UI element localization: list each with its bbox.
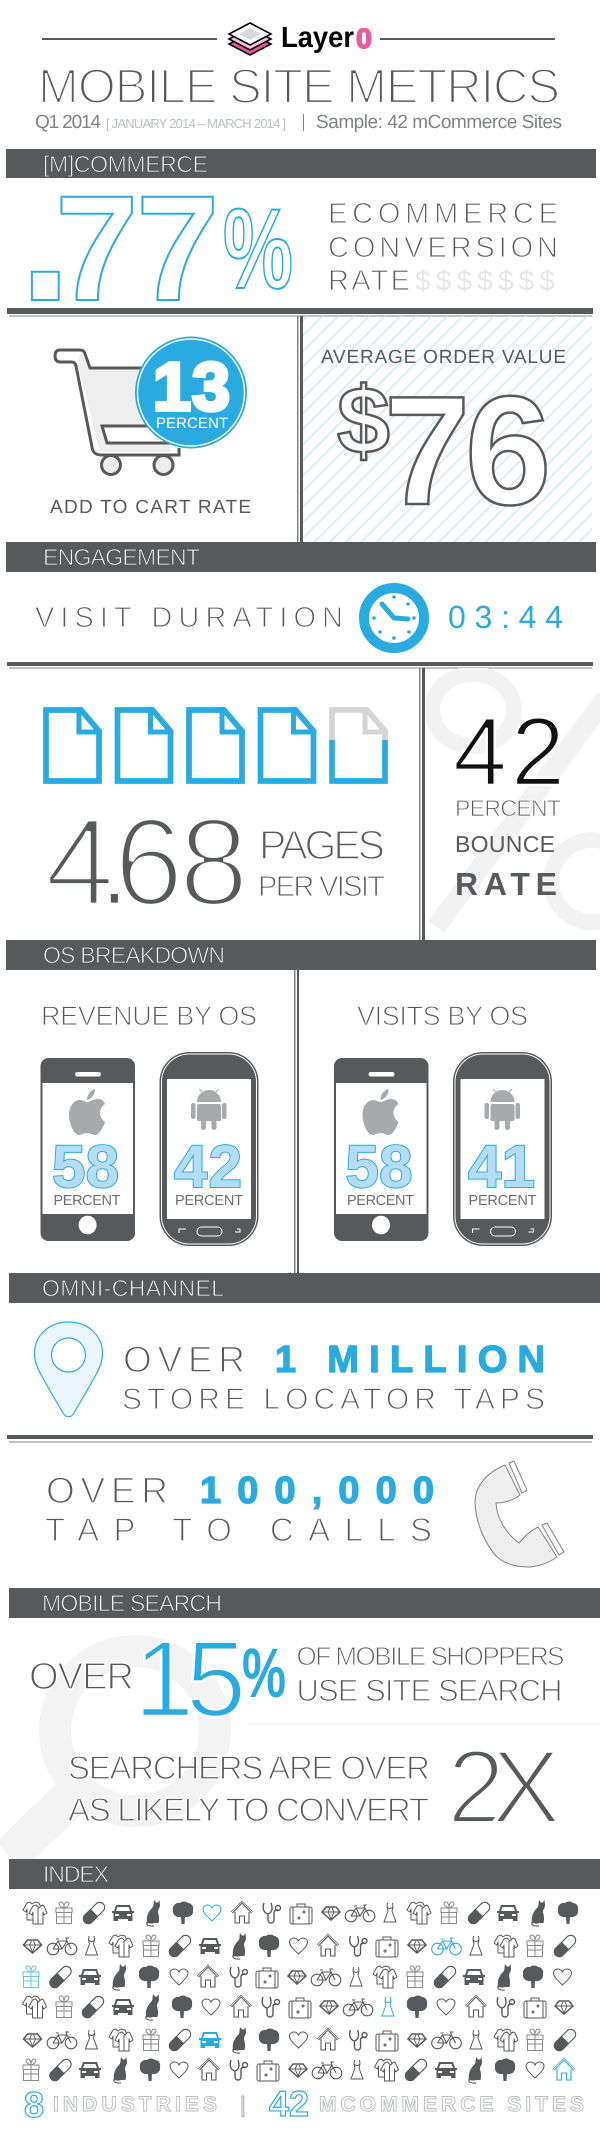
watermark: magnifying glass [0,1651,215,1859]
panel: tap to calls [45,1461,564,1567]
section bar: MOBILE SEARCH: MOBILE SEARCH [42,1590,222,1616]
subtitle: date range and sample: Q1 2014 [35,112,101,133]
label: percent bounce rate [455,795,561,902]
icon: iPhone 58 percent: PERCENT [347,1193,414,1209]
icon: Android phone 41 percent [453,1052,552,1246]
icon: iPhone 58 percent: 58 [346,1133,412,1200]
row 4 [22,1994,573,2020]
label: ecommerce conversion rate: RATE [328,265,410,297]
panel: store locator taps [34,1322,545,1417]
heading: VISITS BY OS [357,1001,528,1031]
label: percent bounce rate: BOUNCE [455,831,555,857]
title: MOBILE SITE METRICS [38,60,560,114]
stat: .77%: 7 [136,164,219,332]
label: ecommerce conversion rate: CONVERSION [328,232,558,264]
panel: mobile search [0,1618,600,1859]
text: tap to calls: TAP TO CALLS [45,1511,432,1548]
stat: 03:44: 03:44 [448,599,563,635]
footer: 8 industries, 42 mcommerce sites: | [240,2092,246,2117]
label: pages per visit: PAGES [259,822,385,868]
text: searchers are over as likely to convert: SEARCHERS ARE OVER [68,1749,430,1786]
section bar: OS BREAKDOWN [6,940,596,970]
panel: add to cart rate [50,336,251,518]
badge: 13 percent [135,336,247,448]
subtitle: date range and sample: [ JANUARY 2014 – MARCH 2014 ] [106,116,286,131]
label: VISIT DURATION [35,602,343,634]
text: of mobile shoppers use site search: OF MOBILE SHOPPERS [296,1641,564,1671]
text: store locator taps: STORE LOCATOR TAPS [122,1383,545,1416]
stat: 15%: 15 [134,1618,246,1739]
label: add to cart rate: ADD TO CART RATE [50,497,251,518]
text: of mobile shoppers use site search [296,1641,564,1708]
footer: 8 industries, 42 mcommerce sites [24,2083,584,2125]
icon: five document pages [46,707,388,781]
panel: ecommerce conversion rate [19,129,558,341]
text: over: OVER [29,1656,134,1698]
logo: Layer0: 0 [356,23,372,54]
label: pages per visit: PER VISIT [258,871,385,903]
logo: Layer0: Layer [281,22,354,54]
icon: Android phone 42 percent [160,1052,258,1246]
row 6 [23,2057,575,2083]
icon: shopping cart [55,350,179,474]
stat: $76: 7 [384,364,470,537]
icon: iPhone 58 percent: 58 [52,1133,119,1200]
text: searchers are over as likely to convert [68,1749,430,1828]
header [35,22,562,133]
icon: map pin [34,1322,102,1417]
footer: 8 industries, 42 mcommerce sites: MCOMMERCE SITES [319,2093,584,2116]
stat: 2X: 2X [447,1729,561,1846]
section bar: OMNI-CHANNEL [9,1273,600,1303]
row 1 [23,1900,578,1926]
text: over 100,000 [46,1470,434,1512]
section bar: MOBILE SEARCH [9,1588,600,1618]
footer: 8 industries, 42 mcommerce sites: INDUSTRIES [53,2093,217,2116]
text: over 100,000: OVER [46,1470,168,1511]
icon: Android phone 42 percent: 42 [174,1133,242,1200]
section bar: INDEX [9,1859,600,1889]
row 5 [24,2027,578,2053]
label: ecommerce conversion rate: $$$$$$$ [415,265,555,296]
stat: .77%: % [223,186,293,313]
icon: telephone handset [475,1461,564,1567]
section bar: [M]COMMERCE: [M]COMMERCE [43,151,208,177]
text: over 100,000: 100,000 [200,1470,434,1512]
stat: $76: 6 [465,364,551,537]
label: AVERAGE ORDER VALUE [321,347,566,368]
stat: $76: $ [337,368,390,474]
logo: Layer0 [42,22,555,55]
panel: bounce rate [432,674,600,927]
subtitle: date range and sample: Sample: 42 mCommerce Sites [316,112,562,133]
icon: Android phone 42 percent: PERCENT [175,1193,243,1209]
icon: clock [364,588,424,648]
icon: iPhone 58 percent: PERCENT [54,1193,121,1209]
panel: average order value [303,316,592,542]
section bar: [M]COMMERCE [6,149,596,178]
label: ecommerce conversion rate [328,198,558,297]
footer: 8 industries, 42 mcommerce sites: 8 [24,2084,44,2125]
section bar: OMNI-CHANNEL: OMNI-CHANNEL [42,1275,224,1301]
section bar: OS BREAKDOWN: OS BREAKDOWN [43,942,225,968]
text: searchers are over as likely to convert: AS LIKELY TO CONVERT [68,1791,429,1828]
text: of mobile shoppers use site search: USE SITE SEARCH [296,1673,562,1708]
section bar: INDEX: INDEX [43,1861,109,1887]
stat: 4.68: 4.68 [45,793,249,932]
stat: .77%: . [19,129,72,341]
row 3 [23,1964,572,1990]
text: over 1 million: 1 MILLION [275,1339,545,1381]
stat: $76 [337,364,551,537]
stat: .77% [19,129,293,341]
panel: visit duration [35,588,563,648]
label: percent bounce rate: RATE [455,866,557,902]
label: ecommerce conversion rate: ECOMMERCE [328,198,558,230]
watermark: decorative percent shape [432,674,600,927]
panel: revenue by OS [40,1001,258,1246]
icon grid: industries index [22,1900,578,2083]
text: over 1 million: OVER [123,1339,245,1380]
panel: visits by OS [334,1001,552,1246]
stat: 42: 42 [453,697,565,806]
icon: iPhone 58 percent [334,1058,428,1241]
heading: REVENUE BY OS [41,1001,257,1031]
label: percent bounce rate: PERCENT [455,795,561,821]
badge: 13 percent: 13 [153,349,230,425]
label: pages per visit [258,822,385,903]
subtitle: date range and sample [35,112,562,133]
icon: Android phone 41 percent: 41 [468,1133,535,1200]
section bar: ENGAGEMENT: ENGAGEMENT [43,544,200,570]
icon: iPhone 58 percent [40,1058,135,1241]
stat: .77%: 7 [55,164,138,332]
row 2 [24,1933,578,1959]
section bar: ENGAGEMENT [6,542,596,572]
badge: 13 percent: PERCENT [156,415,228,432]
icon: Android phone 41 percent: PERCENT [468,1193,537,1209]
text: over 1 million [123,1339,545,1381]
panel: pages per visit [43,707,388,904]
stat: 15%: % [242,1634,286,1712]
footer: 8 industries, 42 mcommerce sites: 42 [269,2083,309,2124]
